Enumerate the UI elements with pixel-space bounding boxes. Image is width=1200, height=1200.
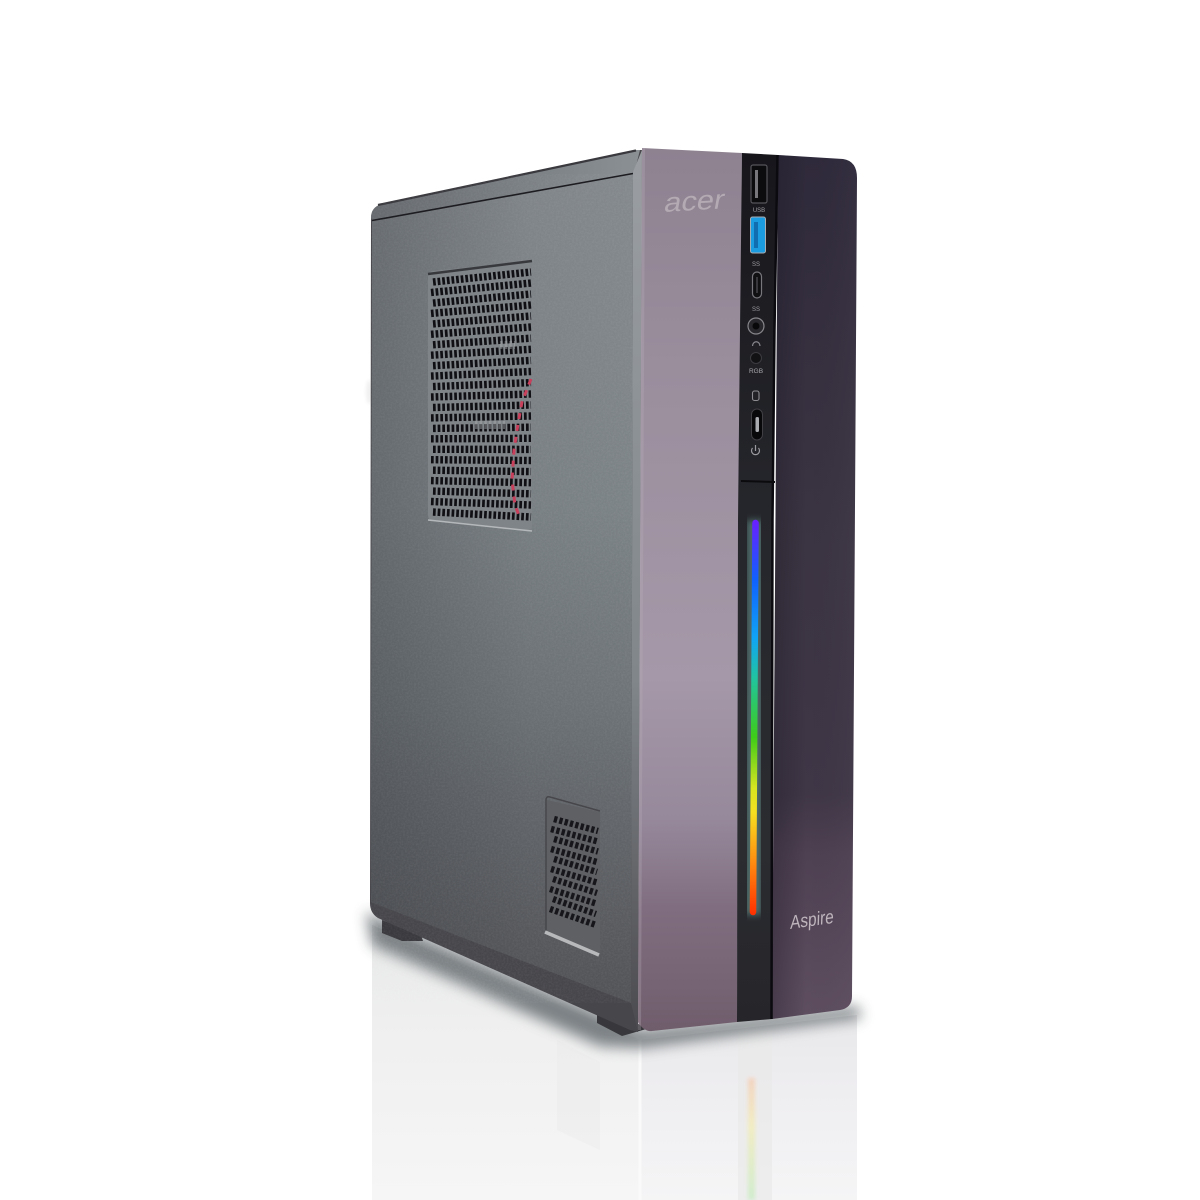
RGB light bar (753, 520, 756, 915)
drive indicator icon (752, 391, 759, 400)
acer logo: acer (662, 183, 728, 218)
side panel (370, 150, 642, 1032)
floor reflection (372, 925, 857, 1200)
foot: front (597, 1010, 650, 1036)
USB-C port (752, 272, 762, 313)
large vent (428, 261, 532, 531)
audio jack (748, 318, 764, 334)
centre black strip (737, 153, 778, 1022)
power icon (752, 445, 760, 455)
purple panel (638, 148, 742, 1031)
internal highlights seen through vent (475, 345, 515, 425)
floor shadow (366, 912, 862, 1048)
USB 3 port: blue (750, 217, 766, 268)
USB-C port: SS (752, 307, 760, 313)
panel groove (372, 174, 633, 220)
Aspire logo: Aspire (790, 907, 834, 934)
front bezel (638, 148, 857, 1031)
headset icon (752, 342, 760, 346)
dark panel (772, 155, 857, 1019)
vent holes (431, 272, 531, 517)
panel corner edge (631, 150, 642, 1032)
USB-A port (751, 165, 767, 214)
faint halo beside side panel (366, 380, 372, 404)
USB 3 port: blue: SS (752, 262, 760, 268)
side panel body (370, 150, 642, 1032)
red cable seen through vent (512, 379, 531, 518)
foot: rear (382, 920, 423, 941)
main side surface (371, 174, 633, 1003)
small vent holes (550, 819, 598, 925)
USB-A port: USB (753, 208, 765, 214)
small vent (545, 797, 600, 955)
RGB button (749, 352, 763, 375)
RGB button: RGB (749, 368, 763, 375)
top lip (371, 150, 640, 220)
power button (752, 409, 762, 440)
